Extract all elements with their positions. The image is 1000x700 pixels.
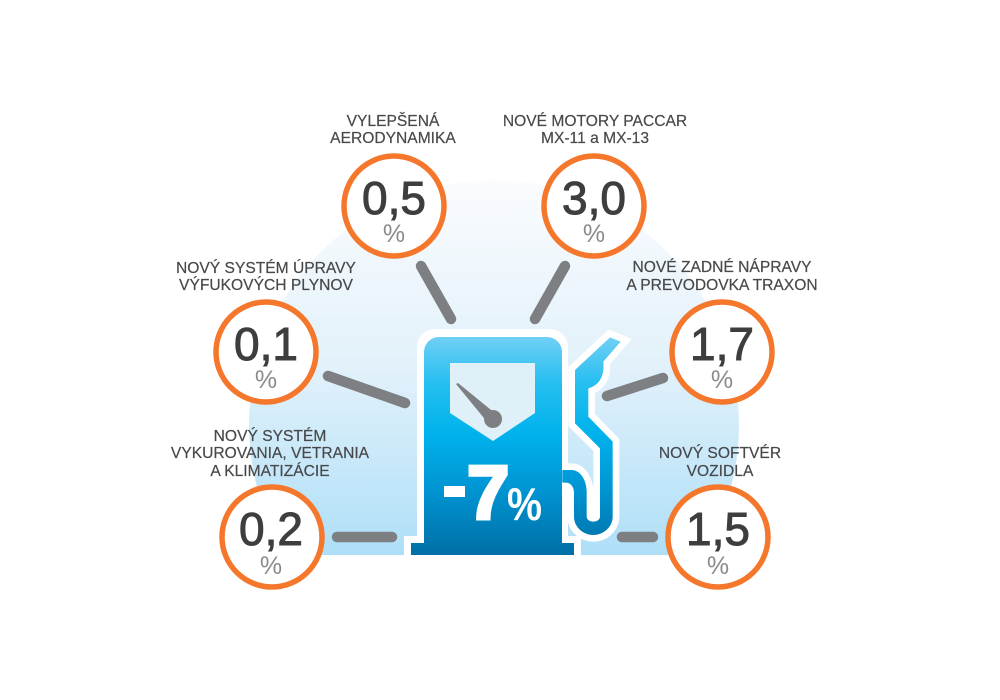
item: software: % — [707, 552, 729, 580]
pump value -7%: 7 — [467, 451, 509, 536]
fuel pump illustration — [404, 329, 621, 555]
item: aerodynamics: AERODYNAMIKA — [330, 130, 456, 147]
item: climate: 0,2 — [239, 503, 303, 555]
item: aerodynamics: % — [383, 220, 405, 248]
item: software: VOZIDLA — [687, 463, 754, 480]
nozzle and hose — [562, 337, 621, 535]
item: aerodynamics — [330, 111, 456, 256]
item: aerodynamics: VYLEPŠENÁ — [347, 111, 440, 130]
item: axles: NOVÉ ZADNÉ NÁPRAVY — [632, 257, 812, 276]
connector: engines — [535, 266, 565, 319]
item: engines: 3,0 — [562, 172, 626, 224]
item: climate: % — [260, 552, 282, 580]
item: axles: 1,7 — [690, 318, 754, 370]
connector: exhaust — [328, 376, 405, 403]
item: exhaust: NOVÝ SYSTÉM ÚPRAVY — [176, 258, 357, 277]
item: aerodynamics: 0,5 — [362, 172, 426, 224]
item: software: NOVÝ SOFTVÉR — [659, 443, 781, 462]
item: engines: MX-11 a MX-13 — [541, 130, 649, 147]
pump body — [411, 337, 574, 555]
item: software: 1,5 — [686, 503, 750, 555]
item: engines — [503, 111, 687, 256]
background light-blue circle — [249, 204, 739, 555]
hose white outline — [562, 337, 621, 535]
item: climate — [171, 426, 370, 587]
pump white outline — [404, 329, 581, 555]
item: exhaust: 0,1 — [234, 318, 298, 370]
item: exhaust: VÝFUKOVÝCH PLYNOV — [179, 275, 354, 294]
gauge panel — [450, 363, 535, 441]
pump value -7% — [444, 451, 542, 536]
item: axles — [626, 257, 818, 402]
item: engines: % — [583, 220, 605, 248]
item: climate: NOVÝ SYSTÉM — [214, 426, 326, 445]
item: engines: NOVÉ MOTORY PACCAR — [503, 111, 687, 130]
connector: aerodynamics — [421, 266, 451, 319]
item: climate: A KLIMATIZÁCIE — [210, 461, 330, 480]
item: software — [659, 443, 781, 587]
gauge needle — [456, 383, 502, 428]
connector: climate — [337, 532, 392, 542]
item: axles: % — [711, 366, 733, 394]
item: exhaust — [176, 258, 357, 402]
connector: axles — [607, 378, 663, 396]
item: exhaust: % — [255, 366, 277, 394]
pump value -7%: % — [507, 478, 542, 530]
connector: software — [622, 532, 653, 542]
item: climate: VYKUROVANIA, VETRANIA — [171, 445, 370, 462]
item: axles: A PREVODOVKA TRAXON — [626, 277, 818, 294]
